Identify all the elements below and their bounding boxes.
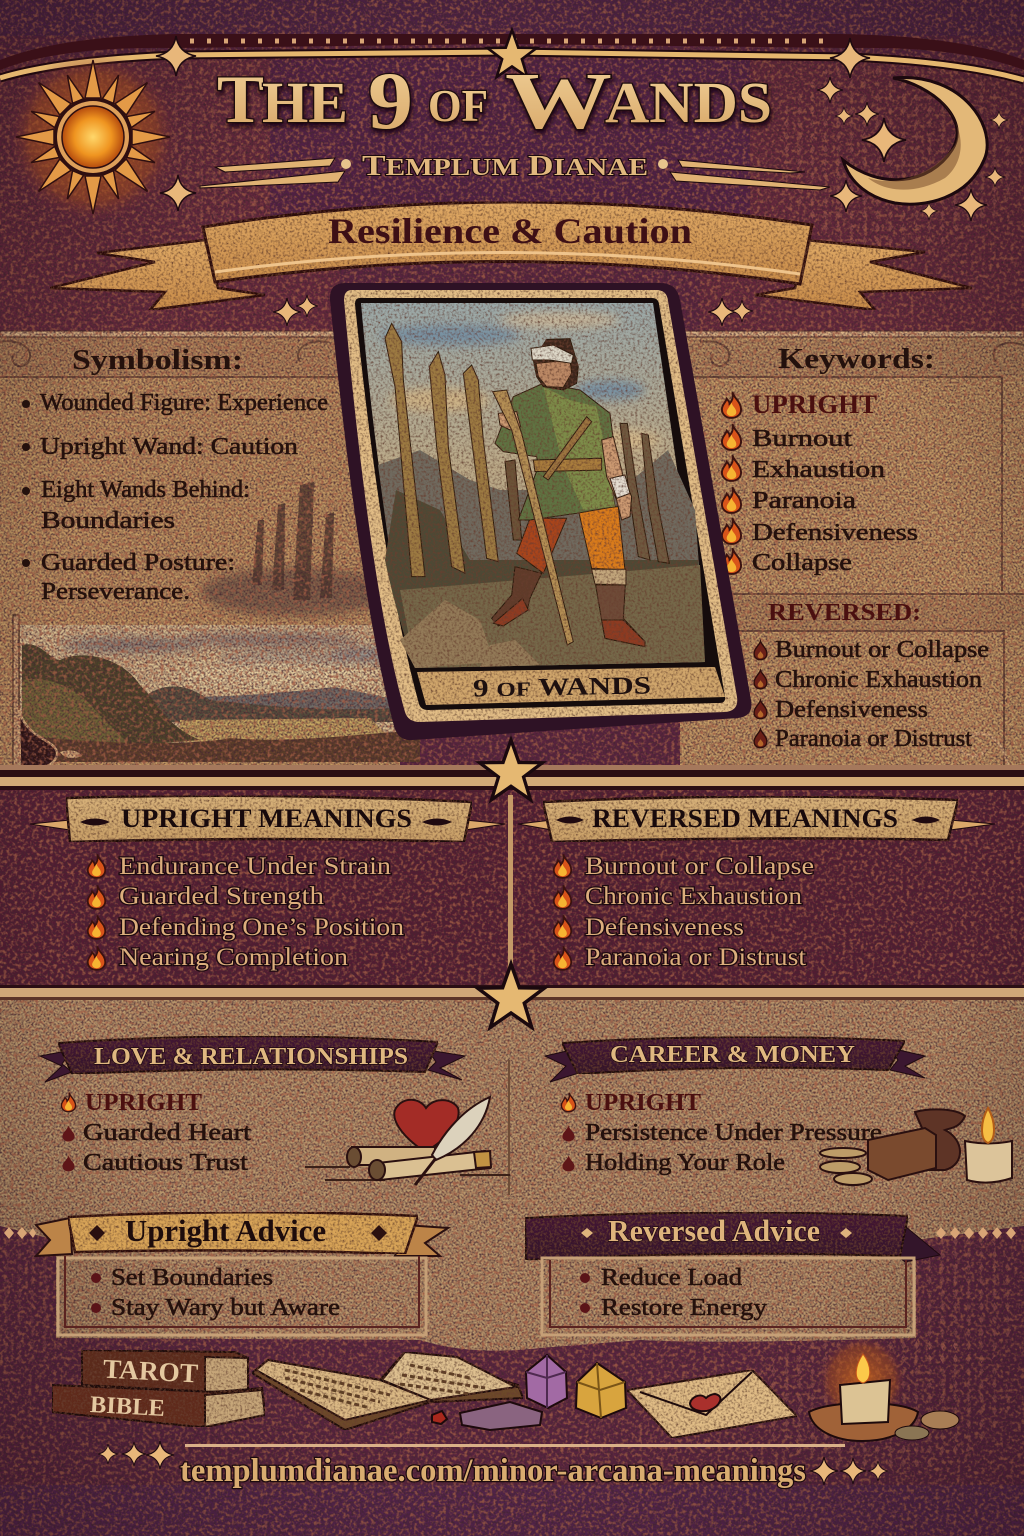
list: symbolism items: Boundaries [41, 508, 175, 534]
list: upright keywords: Burnout [752, 426, 852, 452]
panel: upright advice: Stay Wary but Aware [111, 1295, 340, 1321]
list: reversed keywords: Burnout or Collapse [775, 637, 989, 663]
list: upright meanings: Endurance Under Strain [119, 853, 392, 880]
illustration: tarot and bible books: BIBLE [89, 1392, 166, 1422]
banner: resilience and caution: Resilience & Caution [328, 211, 692, 251]
figure: wounded guardian [492, 339, 645, 647]
illustration: tarot and bible books [52, 1350, 265, 1427]
list: upright meanings: Defending One’s Position [119, 914, 405, 941]
banner: reversed advice: Reversed Advice [608, 1213, 820, 1248]
list: reversed keywords: Defensiveness [775, 697, 928, 723]
icon: chest, pouch, coins and candle [820, 1108, 1012, 1185]
icon: crescent moon and stars [817, 77, 1008, 221]
illustration: open book [252, 1352, 523, 1430]
list: upright keywords: Collapse [752, 550, 852, 576]
card caption: 9 OF WANDS [473, 672, 651, 703]
list: reversed meanings: Chronic Exhaustion [585, 883, 803, 910]
title: T [217, 61, 264, 137]
banner: love and relationships [40, 1036, 465, 1082]
list: upright meanings [88, 853, 405, 971]
list: upright keywords: Exhaustion [752, 457, 885, 483]
icon: heart, quill and scrolls [305, 1097, 510, 1185]
list: reversed keywords: Chronic Exhaustion [775, 667, 982, 693]
banner: resilience and caution [50, 202, 972, 326]
list: career upright: Persistence Under Pressure [585, 1120, 882, 1146]
panel: upright advice [58, 1256, 426, 1335]
illustration: sealed envelope [627, 1370, 797, 1438]
list: symbolism items [22, 390, 328, 605]
icon: top star [487, 30, 537, 77]
list: love upright: Guarded Heart [83, 1120, 251, 1146]
wands behind figure [385, 323, 669, 577]
list: reversed keywords [754, 600, 989, 752]
list: upright keywords [722, 390, 918, 576]
title: W [505, 58, 612, 146]
list: career upright: Holding Your Role [585, 1150, 785, 1176]
list: love upright: Cautious Trust [83, 1150, 248, 1176]
list: symbolism items: Perseverance. [41, 579, 190, 605]
panel: reversed advice: Restore Energy [601, 1295, 767, 1321]
list: reversed meanings: Paranoia or Distrust [585, 944, 806, 971]
tarot card: 9 of wands [330, 283, 751, 740]
panel: symbolism parchment [0, 331, 420, 768]
panel heading: keywords: Keywords: [778, 344, 935, 375]
illustration: lit candle in bowl [809, 1336, 959, 1441]
banner: career and money: CAREER & MONEY [610, 1042, 855, 1068]
banner: career and money [545, 1037, 925, 1082]
subtitle with flourishes [160, 150, 830, 211]
list: career upright [561, 1090, 882, 1176]
staff [493, 390, 573, 645]
list: love upright [61, 1090, 251, 1176]
list: reversed meanings: Defensiveness [585, 914, 744, 941]
banner: reversed meanings: REVERSED MEANINGS [592, 804, 898, 833]
banner: love and relationships: LOVE & RELATIONSHIPS [94, 1044, 408, 1070]
icon: sun [8, 52, 178, 222]
divider with star [0, 964, 1024, 1195]
panel: love and career parchment [0, 995, 1024, 1351]
strip: diamond ornaments on the band edges [4, 1227, 1016, 1239]
list: symbolism items: Upright Wand: Caution [40, 434, 298, 460]
scene: misty landscape with distant wands [20, 482, 420, 762]
list: upright keywords: Defensiveness [752, 520, 918, 546]
title: 9 [368, 55, 413, 146]
title: OF [428, 80, 488, 131]
list: upright keywords: UPRIGHT [752, 390, 877, 419]
list: love upright: UPRIGHT [85, 1090, 202, 1116]
list: upright meanings: Guarded Strength [119, 883, 325, 910]
card caption [417, 667, 725, 705]
list: symbolism items: Eight Wands Behind: [41, 477, 250, 503]
panel heading: symbolism: Symbolism: [72, 344, 243, 376]
header arc ornament [0, 30, 1024, 80]
title [217, 55, 772, 146]
list: upright meanings: Nearing Completion [119, 944, 349, 971]
list: symbolism items: Guarded Posture: [41, 550, 235, 576]
title: HE [262, 70, 348, 135]
banner: upright meanings: UPRIGHT MEANINGS [121, 804, 412, 833]
list: reversed keywords: Paranoia or Distrust [775, 726, 972, 752]
list: career upright: UPRIGHT [585, 1090, 701, 1116]
illustration: tarot and bible books: TAROT [102, 1354, 199, 1388]
title: ANDS [605, 70, 772, 135]
list: reversed keywords: REVERSED: [768, 600, 921, 626]
banner: reversed meanings [518, 796, 995, 842]
footer rule with sparkles [98, 1441, 888, 1485]
banner: upright advice: Upright Advice [125, 1213, 326, 1248]
panel: keywords parchment [680, 331, 1024, 765]
footer url: templumdianae.com/minor-arcana-meanings [180, 1453, 806, 1489]
banner: upright advice [36, 1212, 448, 1256]
list: reversed meanings: Burnout or Collapse [585, 853, 814, 880]
panel: upright advice: Set Boundaries [111, 1265, 273, 1291]
list: symbolism items: Wounded Figure: Experience [40, 390, 328, 416]
illustration: card scene [361, 303, 705, 668]
list: upright keywords: Paranoia [752, 488, 856, 514]
divider with star [0, 740, 1024, 985]
banner: reversed advice [525, 1212, 940, 1262]
banner: upright meanings [30, 796, 505, 842]
panel: reversed advice [542, 1258, 914, 1335]
panel: reversed advice: Reduce Load [601, 1265, 742, 1291]
illustration: crystals and stone [432, 1355, 626, 1430]
list: reversed meanings [554, 853, 814, 971]
subtitle with flourishes: TEMPLUM D IANAE [362, 150, 648, 182]
